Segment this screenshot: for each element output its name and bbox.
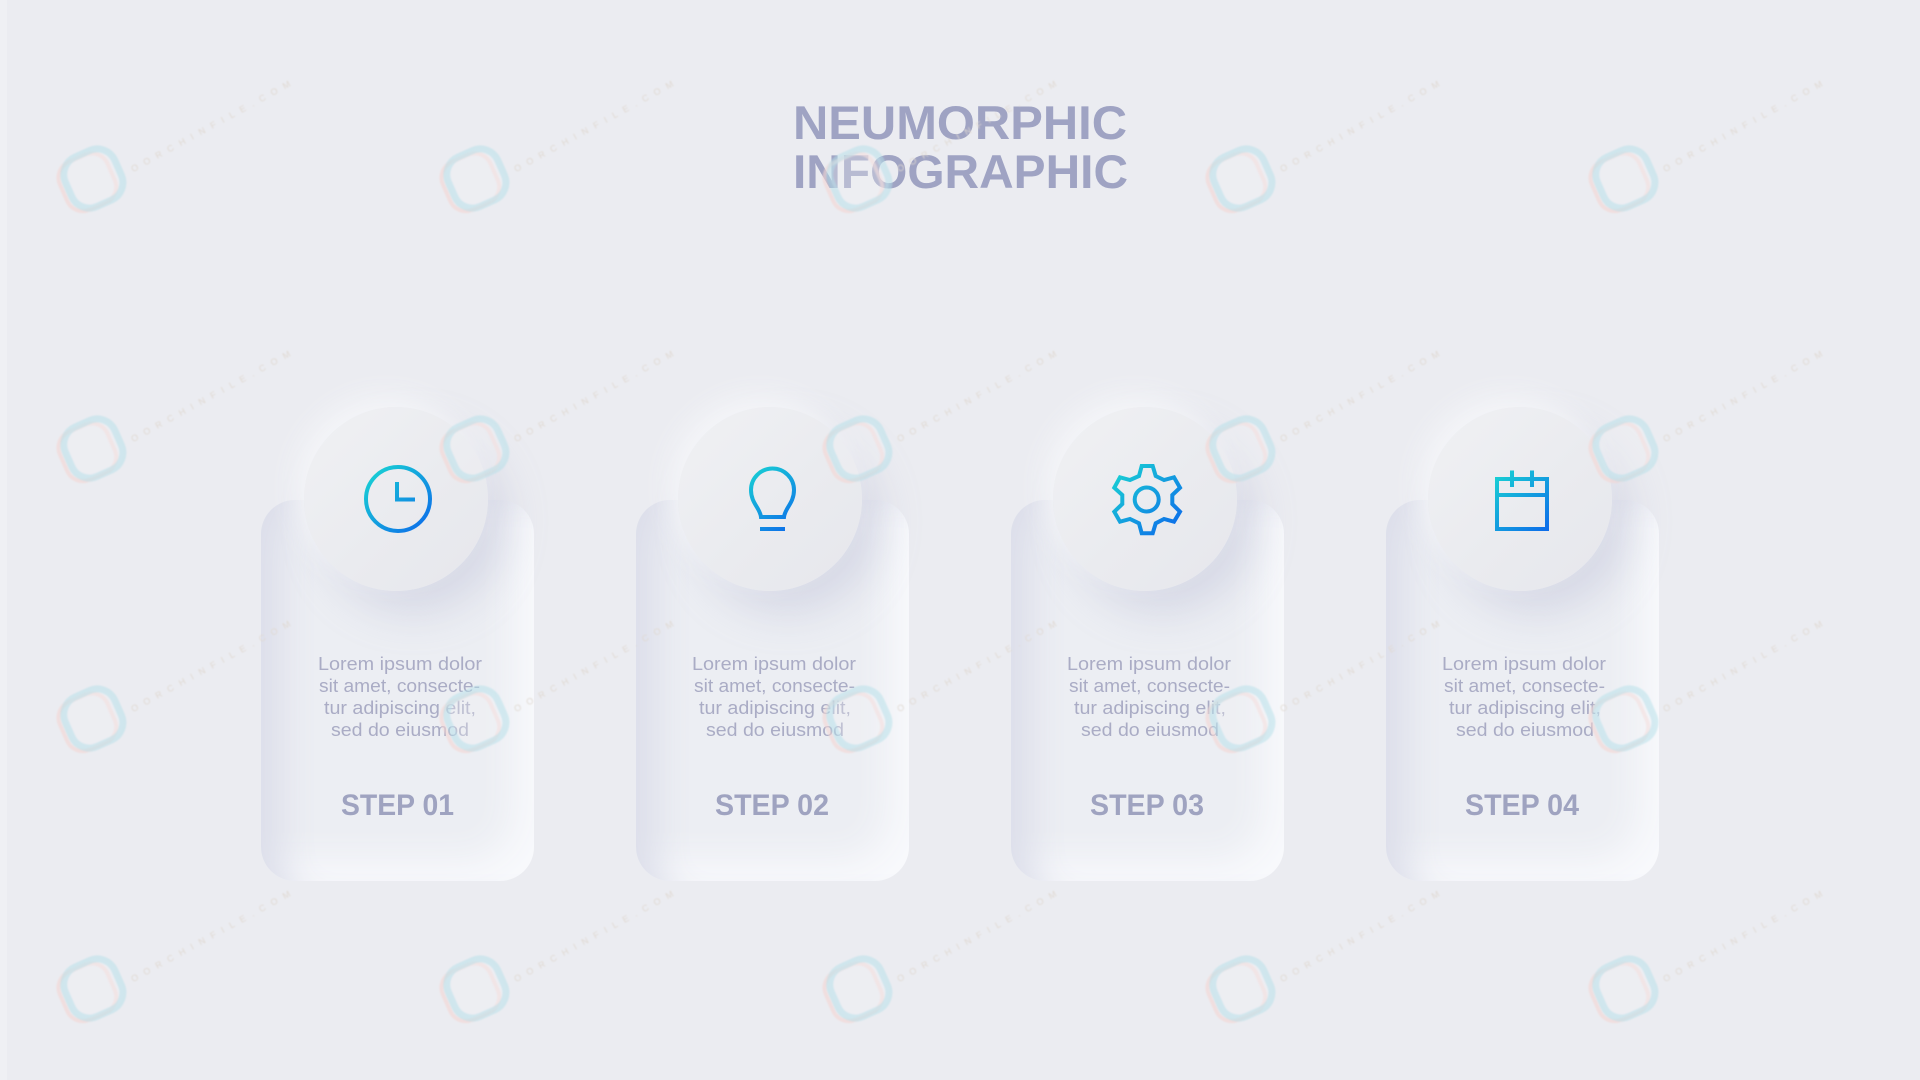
circle: step 03 <box>1053 407 1237 591</box>
text block: step 04 description: tur adipiscing elit, <box>1449 698 1601 718</box>
circle: step 01 <box>304 407 488 591</box>
watermark row 2 <box>53 345 1830 487</box>
label: step 04: STEP 04 <box>1465 789 1579 822</box>
text block: step 03 description: sed do eiusmod <box>1081 720 1219 740</box>
text block: step 03 description <box>1067 654 1231 740</box>
watermark row 3: OORCHINFILE.COM <box>512 615 681 714</box>
label: step 02: STEP 02 <box>715 789 829 822</box>
watermark row 4: OORCHINFILE.COM <box>1278 885 1447 984</box>
watermark row 2: OORCHINFILE.COM <box>129 345 298 444</box>
circle: step 04 <box>1428 407 1612 591</box>
panel: step 03 card <box>1011 500 1284 881</box>
watermark row 3: OORCHINFILE.COM <box>1661 615 1830 714</box>
watermark row 2: OORCHINFILE.COM <box>1661 345 1830 444</box>
text block: step 01 description: sit amet, consecte- <box>319 676 480 696</box>
circle shadow: step 01 <box>304 407 488 591</box>
text block: step 04 description: Lorem ipsum dolor <box>1442 654 1606 674</box>
label: step 01: STEP 01 <box>341 789 454 822</box>
text block: step 02 description: sed do eiusmod <box>706 720 844 740</box>
watermark row 4 <box>53 885 1830 1027</box>
panel: step 02 card <box>636 500 909 881</box>
watermark row 4: OORCHINFILE.COM <box>1661 885 1830 984</box>
watermark row 2: OORCHINFILE.COM <box>512 345 681 444</box>
circle shadow: step 02 <box>678 407 862 591</box>
title: INFOGRAPHIC <box>793 145 1128 198</box>
watermark row 1: OORCHINFILE.COM <box>1661 75 1830 174</box>
text block: step 02 description <box>692 654 856 740</box>
watermark row 1: OORCHINFILE.COM <box>1278 75 1447 174</box>
watermark row 2: OORCHINFILE.COM <box>1278 345 1447 444</box>
watermark row 4: OORCHINFILE.COM <box>895 885 1064 984</box>
text block: step 04 description: sit amet, consecte- <box>1444 676 1605 696</box>
label: step 03: STEP 03 <box>1090 789 1204 822</box>
icon: calendar <box>1497 470 1547 529</box>
watermark row 2: OORCHINFILE.COM <box>895 345 1064 444</box>
text block: step 03 description: tur adipiscing elit, <box>1074 698 1226 718</box>
watermark row 3: OORCHINFILE.COM <box>895 615 1064 714</box>
icon: gear <box>1114 466 1180 533</box>
text block: step 01 description: Lorem ipsum dolor <box>318 654 482 674</box>
title: NEUMORPHIC <box>793 96 1127 149</box>
watermark row 1: OORCHINFILE.COM <box>129 75 298 174</box>
text block: step 03 description: sit amet, consecte- <box>1069 676 1230 696</box>
text block: step 01 description: sed do eiusmod <box>331 720 469 740</box>
circle shadow: step 04 <box>1428 407 1612 591</box>
panel: step 04 card <box>1386 500 1659 881</box>
text block: step 02 description: Lorem ipsum dolor <box>692 654 856 674</box>
text block: step 01 description <box>318 654 482 740</box>
watermark row 1 <box>53 75 1830 217</box>
text block: step 04 description <box>1442 654 1606 740</box>
title <box>793 96 1128 198</box>
circle shadow: step 03 <box>1053 407 1237 591</box>
text block: step 04 description: sed do eiusmod <box>1456 720 1594 740</box>
text block: step 01 description: tur adipiscing elit, <box>324 698 476 718</box>
icon: light bulb <box>751 468 794 529</box>
watermark row 1: OORCHINFILE.COM <box>895 75 1064 174</box>
watermark row 3: OORCHINFILE.COM <box>129 615 298 714</box>
text block: step 02 description: tur adipiscing elit, <box>699 698 851 718</box>
watermark row 1: OORCHINFILE.COM <box>512 75 681 174</box>
watermark row 4: OORCHINFILE.COM <box>512 885 681 984</box>
watermark row 3: OORCHINFILE.COM <box>1278 615 1447 714</box>
panel: step 01 card <box>261 500 534 881</box>
icon: clock <box>366 467 430 531</box>
watermark row 4: OORCHINFILE.COM <box>129 885 298 984</box>
text block: step 03 description: Lorem ipsum dolor <box>1067 654 1231 674</box>
watermark row 3 <box>53 615 1830 757</box>
text block: step 02 description: sit amet, consecte- <box>694 676 855 696</box>
circle: step 02 <box>678 407 862 591</box>
